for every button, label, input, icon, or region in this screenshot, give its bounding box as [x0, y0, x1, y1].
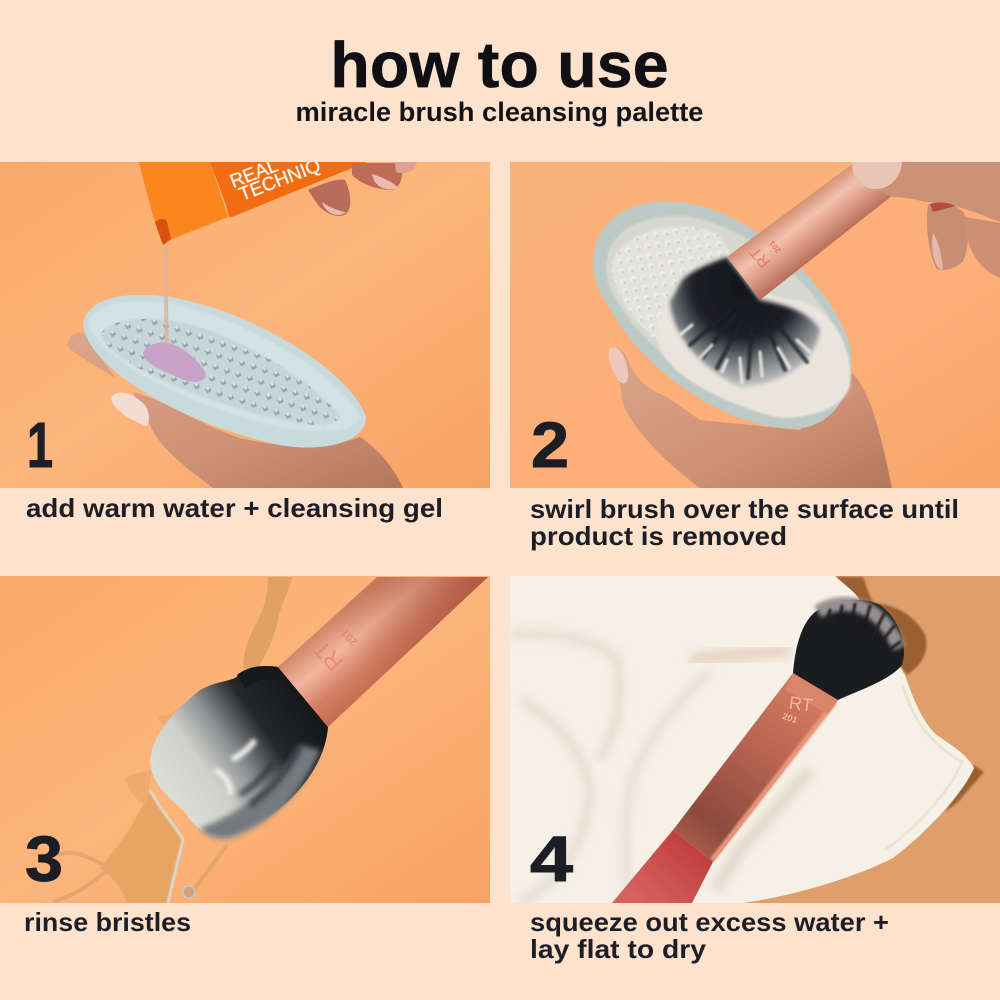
icon: rose gold brush handle	[727, 162, 893, 300]
title: how to use	[330, 29, 668, 101]
icon: hand holding palette	[609, 347, 892, 488]
icon: makeup brush	[612, 600, 904, 903]
icon: blue cleansing palette with bumps	[83, 295, 366, 448]
icon: hand under palette	[67, 333, 403, 488]
icon: wet bristles	[150, 666, 328, 838]
icon: gel stream	[166, 243, 167, 345]
step 4 caption: lay flat to dry	[530, 934, 707, 964]
icon: white towel	[510, 576, 974, 903]
brush logo: RT	[788, 693, 814, 716]
icon: brush bristles	[670, 257, 820, 387]
icon: rose gold brush handle: 201	[339, 626, 360, 648]
icon: rose gold brush handle	[278, 577, 488, 727]
brush logo: 201	[781, 711, 799, 725]
step number 4: 4	[530, 823, 573, 895]
panel: step 3 photo	[0, 576, 490, 903]
panel: step 2 photo	[510, 162, 1000, 488]
step 3 caption: rinse bristles	[24, 907, 191, 937]
brush logo	[782, 696, 813, 724]
palette foam	[658, 292, 852, 418]
subtitle: miracle brush cleansing palette	[296, 97, 704, 127]
step 4 caption: squeeze out excess water +	[530, 907, 889, 937]
icon: hand on brush handle	[852, 162, 1000, 278]
step 4 caption	[530, 907, 889, 964]
icon: water splash	[53, 703, 227, 903]
icon: hand holding tube	[308, 162, 417, 216]
panel: step 1 photo	[0, 155, 490, 488]
icon: orange cleansing gel tube: TECHNIQ	[236, 155, 324, 206]
step 2 caption: swirl brush over the surface until	[530, 494, 959, 524]
icon: rose gold brush handle: RT	[308, 634, 349, 676]
tube lettering: REAL	[227, 155, 281, 193]
brush bristles	[793, 600, 904, 700]
icon: thumb nail	[111, 393, 149, 426]
step number 3: 3	[25, 823, 63, 895]
step 2 caption	[530, 494, 959, 551]
icon: rose gold brush handle: 201	[767, 238, 783, 255]
icon: pink cleansing gel	[143, 342, 206, 382]
panel: step 4 photo	[510, 576, 1000, 903]
towel shadow	[835, 577, 984, 812]
step number 1: 1	[27, 409, 53, 481]
step number 2: 2	[531, 409, 569, 481]
icon: blue palette with foam	[593, 202, 851, 429]
icon: orange cleansing gel tube	[139, 155, 367, 245]
icon: rose gold brush handle: RT	[747, 243, 774, 270]
icon: water stream	[243, 577, 292, 670]
step 1 caption: add warm water + cleansing gel	[26, 493, 443, 523]
step 2 caption: product is removed	[530, 521, 787, 551]
